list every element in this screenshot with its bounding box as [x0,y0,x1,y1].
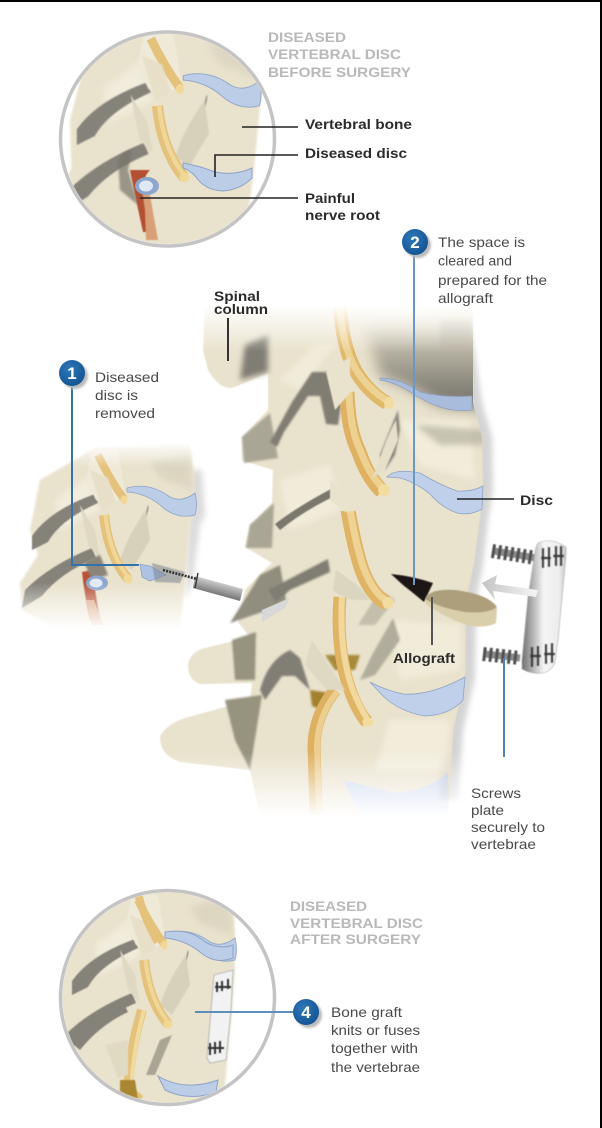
dark folds [270,372,343,447]
badge 4 shadow [296,1002,322,1028]
step 2 text [438,234,547,306]
panel: before surgery magnifier [60,26,274,250]
title: before surgery: DISEASED [268,30,346,45]
disc 1 [380,378,472,411]
bottom screw heads [530,643,555,667]
page border [0,0,602,2]
step 1 text: Diseased [95,369,159,385]
callout: painful nerve root [140,191,381,223]
nerves [340,305,387,403]
magnifier lens: before [60,32,274,246]
disc 4 [343,772,448,801]
wings [242,413,278,463]
vertebra silhouette [160,300,483,825]
callout: diseased disc [215,146,408,177]
title: after surgery [290,899,423,947]
label: disc: Disc [520,493,554,508]
label: allograft [393,597,456,666]
step 2 text: prepared for the [438,272,547,288]
badge 2 [402,229,428,255]
badge 4: 4 [301,1003,311,1022]
badge 4 [293,999,319,1025]
label: spinal column: Spinal [214,289,260,304]
badge 1 [59,360,85,386]
top screw heads [541,546,564,568]
illustration: main spinal column [160,300,493,825]
magnifier lens: after [60,890,274,1104]
label: spinal column: column [214,302,268,317]
step 4 callout [195,999,420,1075]
step 4 text: together with [331,1040,418,1056]
badge 2 shadow [405,232,431,258]
arrow [482,575,538,600]
step 4 text: knits or fuses [331,1022,420,1038]
highlight patches [282,468,338,527]
panel: after surgery magnifier [60,885,274,1110]
label: disc [457,493,554,508]
title: before surgery: VERTEBRAL DISC [268,47,401,62]
label: screws: plate [471,802,504,818]
title: before surgery [268,30,411,80]
step 1 leader [72,380,139,565]
disc 3 [370,677,465,716]
inset spine illustration [20,444,205,630]
implanted plate [207,970,233,1063]
step 2 callout [402,229,547,585]
panel: step 1 disc removal [20,360,243,630]
bottom screw shaft [485,654,520,658]
overlapping bone [326,357,350,410]
allograft [425,590,497,627]
step 4 text [331,1004,420,1075]
top vertebra shadow [365,325,490,445]
spine detail: after surgery [60,885,236,1110]
step 1 text [95,369,159,421]
spine detail: before surgery [63,26,262,250]
step 1 text: disc is [95,387,138,403]
step 2 text: cleared and [438,252,512,268]
step 4 text: the vertebrae [331,1059,420,1075]
badge 2: 2 [410,233,420,252]
badge 1: 1 [67,364,77,383]
label: screws: Screws [471,785,521,801]
disc 2 [387,471,483,514]
bottom screw threads [483,654,520,658]
title: before surgery: BEFORE SURGERY [268,65,411,80]
plate and screws [483,541,566,673]
plate [522,541,566,673]
title: after surgery: AFTER SURGERY [290,932,421,947]
callout: painful nerve root: nerve root [305,208,381,223]
label: allograft: Allograft [393,651,456,666]
top screw shaft [494,551,536,558]
step 4 text: Bone graft [331,1004,402,1020]
callout: vertebral bone: Vertebral bone [305,117,413,132]
top screw threads [492,551,536,558]
label: screws: securely to [471,819,545,835]
callout: diseased disc: Diseased disc [305,146,408,161]
callout: painful nerve root: Painful [305,191,355,206]
step 2 text: allograft [438,290,493,306]
label: spinal column [214,289,268,361]
title: after surgery: DISEASED [290,899,367,914]
label: screws [471,658,545,852]
label: screws: vertebrae [471,836,536,852]
right edge shadow [440,320,493,800]
dark gap [391,574,433,602]
transverse process shadow blocks [225,695,262,770]
surgical tool [163,570,243,601]
badge 1 shadow [62,363,88,389]
step 1 text: removed [95,405,155,421]
step 2 text: The space is [438,234,525,250]
title: after surgery: VERTEBRAL DISC [290,916,423,931]
